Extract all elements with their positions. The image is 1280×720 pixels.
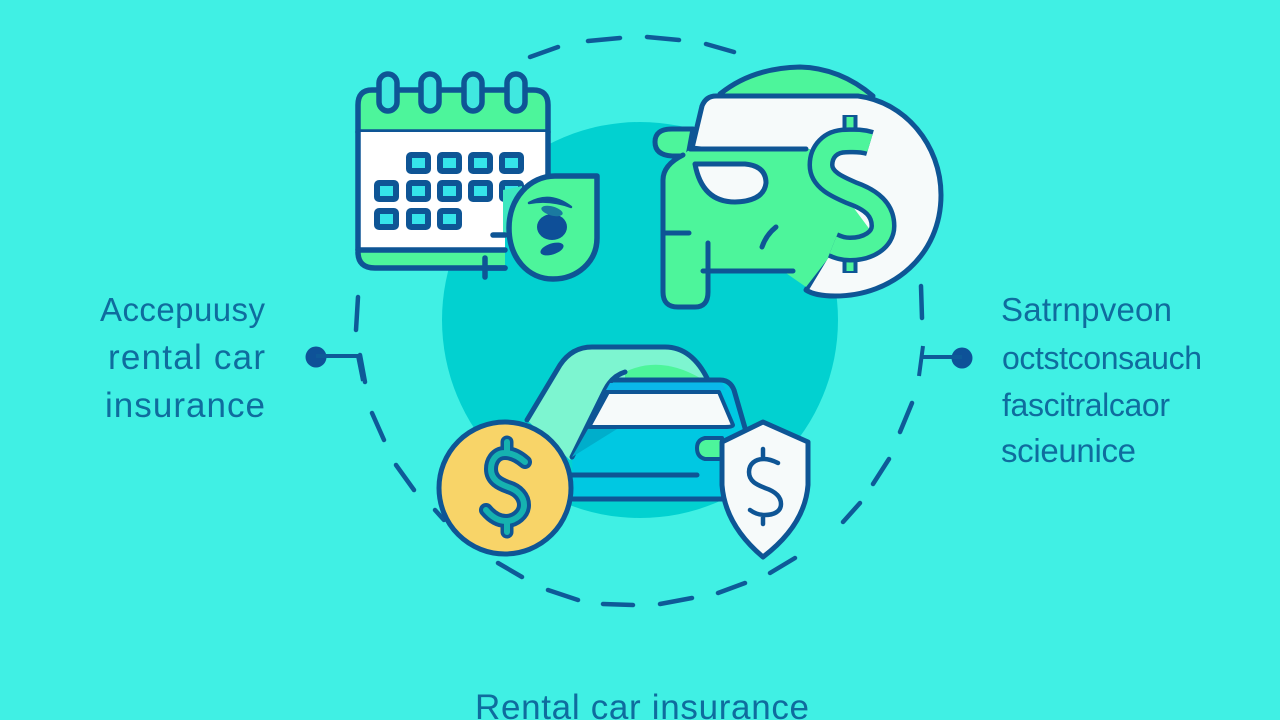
central teal circle <box>442 122 838 518</box>
headlight <box>697 438 722 459</box>
text: left label: Accepuusy <box>100 291 266 328</box>
body lines <box>570 475 725 499</box>
left connector <box>306 346 363 381</box>
roof dome <box>720 67 873 96</box>
shield dollar <box>749 449 781 524</box>
text: right label: fascitralcaor <box>1002 387 1170 423</box>
arched roof <box>527 347 708 460</box>
dollar sign <box>821 115 883 273</box>
coin dollar <box>486 442 525 532</box>
roof green highlight <box>625 365 700 378</box>
text: left label: rental car <box>108 338 265 377</box>
car body <box>572 380 748 499</box>
white disc body <box>692 96 941 296</box>
side mirror <box>655 129 693 156</box>
shaded hood <box>572 429 617 457</box>
text: left label: insurance <box>105 386 265 425</box>
calendar bottom marks <box>484 235 505 277</box>
headlight <box>695 164 766 202</box>
yellow coin <box>439 422 571 554</box>
drop face marks <box>529 198 571 258</box>
text: right label <box>1001 291 1202 469</box>
text: right label: Satrnpveon <box>1001 291 1172 328</box>
icon: calendar with badge <box>358 74 597 279</box>
calendar rings <box>379 74 525 111</box>
roof strip <box>606 383 726 390</box>
icon: car with dollar <box>655 67 941 307</box>
text: right label: octstconsauch <box>1002 340 1202 376</box>
windshield <box>590 392 733 427</box>
icon: car with coin and shield <box>439 347 808 557</box>
badge shadow <box>503 186 522 236</box>
green car body <box>663 149 885 307</box>
calendar date grid <box>377 155 521 227</box>
dashed ring <box>356 37 922 605</box>
text: right label: scieunice <box>1001 432 1136 469</box>
calendar body <box>358 90 548 268</box>
right connector <box>919 346 972 376</box>
text: left label <box>100 291 266 425</box>
green drop badge <box>509 176 597 279</box>
white shield <box>722 422 808 557</box>
